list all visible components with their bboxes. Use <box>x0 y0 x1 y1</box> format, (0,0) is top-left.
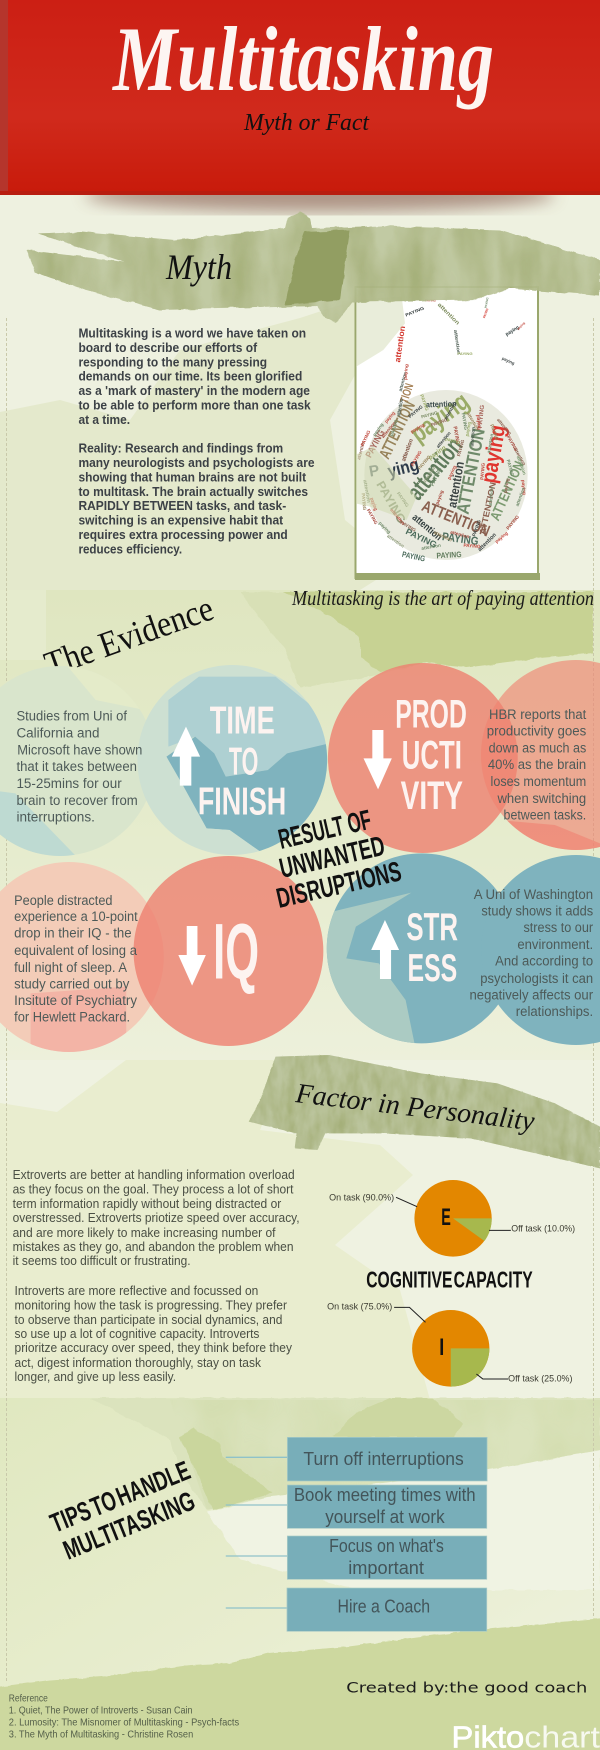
pie chart: introverts: Off task (25.0%) <box>508 1374 572 1384</box>
myth text block: RAPIDLY BETWEEN tasks, and task- <box>78 499 286 513</box>
word cloud image: PAYING <box>407 404 424 419</box>
pie chart: extroverts: E <box>441 1205 451 1231</box>
word cloud image: P <box>368 462 381 481</box>
circle: studies <box>0 666 146 856</box>
text: people: for Hewlett Packard. <box>14 1010 130 1025</box>
word cloud image: PAYING <box>399 520 417 533</box>
label: stress: ESS <box>408 946 457 989</box>
label: time to finish: FINISH <box>198 779 286 823</box>
text: extroverts: it seems too difficult or frustrating. <box>13 1254 191 1268</box>
word cloud image: ATTENTION <box>377 399 419 462</box>
bottom torn band <box>0 1618 600 1750</box>
references: 1. Quiet, The Power of Introverts - Susan Cain <box>9 1706 193 1716</box>
myth text block: demands on our time. Its been glorified <box>78 370 302 384</box>
text: people: Insitute of Psychiatry <box>14 993 137 1009</box>
background: tips section <box>0 1398 600 1750</box>
word cloud image: attention <box>396 398 405 417</box>
word cloud image: PAYING <box>405 305 426 318</box>
subtitle: Myth or Fact <box>243 110 370 136</box>
text: extroverts: Extroverts are better at handling information overload <box>13 1168 295 1182</box>
text: people: People distracted <box>14 893 112 909</box>
myth text block: at a time. <box>78 413 130 427</box>
word cloud image: PAYING <box>482 308 489 319</box>
word cloud image: PAYING <box>419 394 430 412</box>
word cloud image: paying <box>427 444 448 462</box>
word cloud image: paying <box>403 363 409 380</box>
text: studies: brain to recover from <box>16 793 138 809</box>
text: extroverts: term information rapidly without being distracted or <box>13 1197 282 1211</box>
word cloud image: PAYING <box>389 419 399 437</box>
word cloud image: paying <box>503 478 510 494</box>
references: Reference <box>9 1694 48 1704</box>
circle: productivity <box>328 663 518 853</box>
word cloud image: attention <box>421 543 441 551</box>
tip: book meeting times: yourself at work <box>325 1507 445 1528</box>
word cloud image: paying <box>435 489 444 505</box>
arrow: productivity down <box>364 730 392 789</box>
word cloud image: attention <box>386 533 405 549</box>
text: introverts: act, digest information thoroughly, stay on task <box>15 1356 261 1370</box>
label: productivity: UCTI <box>402 733 462 778</box>
word cloud image: PAYING <box>430 417 448 428</box>
text: people: drop in their IQ - the <box>14 926 132 941</box>
heading: Myth: Myth <box>165 247 232 287</box>
header shadow <box>85 178 555 212</box>
tip: turn off interruptions: Turn off interruptions <box>303 1449 464 1470</box>
text: extroverts <box>13 1168 300 1268</box>
tips section <box>9 1437 600 1750</box>
myth brush stroke <box>26 212 600 323</box>
word cloud image: attention <box>380 421 397 439</box>
word cloud image: PAYING <box>463 543 481 549</box>
word cloud image: paying <box>494 531 509 544</box>
tip: hire a coach: Hire a Coach <box>337 1597 430 1617</box>
label: productivity <box>395 692 467 818</box>
word cloud image: PAYING <box>436 550 462 560</box>
dashed side borders <box>6 318 594 1683</box>
myth text block: board to describe our efforts of <box>78 341 258 355</box>
word cloud image: ying <box>385 454 421 481</box>
myth text block: to multitask. The brain actually switches <box>78 485 308 499</box>
references <box>9 1694 239 1740</box>
background washes: myth section <box>0 300 420 590</box>
word cloud image: attention <box>426 399 457 409</box>
word cloud image: PAYING <box>479 462 486 480</box>
connector lines <box>226 1457 287 1608</box>
word cloud image: attention <box>401 438 415 462</box>
pie chart: extroverts <box>329 1180 575 1257</box>
text: extroverts: overstressed. Extroverts priotize speed over accuracy, <box>13 1211 300 1225</box>
text: people <box>14 893 138 1025</box>
pie chart: introverts <box>327 1302 572 1387</box>
callout: result of unwanted disruptions: RESULT OF <box>275 804 374 855</box>
myth text block: showing that human brains are not built <box>78 470 307 484</box>
word cloud image: PAYING <box>505 514 520 531</box>
word cloud image: paying <box>445 436 461 445</box>
text: uni of washington <box>470 887 593 1020</box>
myth text block: requires extra processing power and <box>78 528 288 542</box>
text: studies: that it takes between <box>16 759 137 775</box>
label: time to finish: TO <box>229 739 258 783</box>
word cloud image: attention <box>477 532 498 553</box>
word cloud image: PAYING <box>461 413 469 431</box>
heading: The Evidence: The Evidence <box>39 588 218 685</box>
word cloud image: attention <box>488 487 494 507</box>
word cloud image: ATTENTION <box>419 498 492 541</box>
word cloud image: PAYING <box>506 459 515 477</box>
circle: people <box>0 862 164 1053</box>
label: stress: STR <box>406 905 458 948</box>
tip: focus: important <box>348 1558 424 1579</box>
word cloud image: PAYING <box>373 478 409 526</box>
arrow: IQ down <box>178 926 206 986</box>
text: introverts: Introverts are more reflective and focussed on <box>15 1284 258 1298</box>
references: 3. The Myth of Multitasking - Christine Rosen <box>9 1730 193 1740</box>
word cloud image: paying <box>410 422 425 434</box>
word cloud image: PAYING <box>366 508 379 526</box>
tip: book meeting times: Book meeting times with <box>294 1485 476 1506</box>
word cloud image: attention <box>433 530 453 543</box>
word cloud image: attention <box>422 465 437 484</box>
myth text block: as a 'mark of mastery' in the modern age <box>78 384 310 398</box>
tip: focus: Focus on what's <box>329 1536 444 1557</box>
word cloud image: TION <box>397 382 416 405</box>
word cloud image: attention <box>361 479 371 503</box>
text: studies: interruptions. <box>16 809 95 825</box>
text: introverts: so use up a lot of cognitive capacity. Introverts <box>15 1327 260 1341</box>
word cloud image <box>355 287 540 580</box>
text: studies: 15-25mins for our <box>16 776 122 792</box>
word cloud image: attention <box>436 302 461 327</box>
text: extroverts: mistakes as they go, and abandon the problem when <box>13 1240 293 1254</box>
word cloud image: paying <box>384 410 396 424</box>
word cloud image: attention <box>496 417 512 436</box>
pie chart: introverts: I <box>439 1335 444 1361</box>
tip: focus <box>287 1536 487 1579</box>
word cloud image: PAYING <box>488 424 499 441</box>
arrow: stress up <box>371 920 399 979</box>
word cloud image: paying <box>505 325 520 338</box>
text: studies: Studies from Uni of <box>16 709 128 724</box>
text: studies: Microsoft have shown <box>17 742 142 758</box>
pie chart: introverts: On task (75.0%) <box>327 1302 392 1312</box>
word cloud image: paying <box>404 386 474 448</box>
word cloud image: PAYING <box>478 404 486 429</box>
myth text block: switching is an expensive habit that <box>78 514 284 528</box>
text: people: equivalent of losing a <box>14 943 138 959</box>
word cloud image: paying <box>501 356 516 366</box>
word cloud image: attention <box>443 401 457 420</box>
word cloud image: attention <box>450 529 470 539</box>
myth text block: responding to the many pressing <box>78 355 267 369</box>
myth text block: Reality: Research and findings from <box>78 442 283 456</box>
word cloud image: paying <box>476 423 510 485</box>
credit: Created by:the good coach <box>346 1680 587 1696</box>
word cloud image: paying <box>368 497 378 512</box>
myth text block: to be able to perform more than one task <box>78 398 312 412</box>
tip: hire a coach <box>287 1588 487 1631</box>
heading: tips to handle multitasking: MULTITASKING <box>59 1486 199 1566</box>
tip: turn off interruptions <box>287 1437 487 1481</box>
text: studies <box>16 709 142 825</box>
word cloud image: PAYING <box>361 493 367 511</box>
word cloud image: attention <box>515 487 526 507</box>
word cloud image: PAYING <box>430 467 444 488</box>
label: productivity: PROD <box>395 692 467 737</box>
word cloud image: ATTENTION <box>453 427 489 516</box>
word cloud image: attention <box>398 371 408 392</box>
text: introverts: monitoring how the task is progressing. They prefer <box>15 1298 287 1312</box>
word cloud image: attention <box>389 507 406 526</box>
background: evidence section <box>0 590 600 1060</box>
word cloud image: PAYING <box>410 450 423 467</box>
word cloud image: attention <box>453 329 461 355</box>
evidence circles <box>0 660 600 1053</box>
pie chart: extroverts: On task (90.0%) <box>329 1193 394 1203</box>
logo: Piktochart <box>452 1719 600 1750</box>
circle: time to finish <box>137 665 333 857</box>
word cloud image: ATTENTION <box>486 459 527 523</box>
word cloud image: paying <box>378 521 392 535</box>
text: people: full night of sleep. A <box>14 960 128 976</box>
word cloud image: PAYING <box>360 429 372 447</box>
callout: result of unwanted disruptions: UNWANTED <box>276 830 388 884</box>
word cloud image: attention <box>393 325 407 363</box>
heading: Factor in Personality: Factor in Personality <box>293 1078 537 1137</box>
word cloud image: PAYING <box>417 454 432 471</box>
word cloud image: PAYING <box>364 428 387 459</box>
text: introverts: prioritze accuracy over speed, they think before they <box>15 1341 292 1355</box>
word cloud image: paying <box>372 422 385 437</box>
word cloud image: PAYING <box>456 439 465 457</box>
myth text block: Multitasking is a word we have taken on <box>78 326 306 340</box>
word cloud image: paying <box>446 465 457 480</box>
arrow: time up <box>172 727 200 786</box>
word cloud image: attention <box>469 427 476 447</box>
circle: uni of washington <box>481 855 600 1045</box>
text: extroverts: as they focus on the goal. They process a lot of short <box>13 1182 294 1196</box>
word cloud image: paying <box>516 321 526 331</box>
label: stress <box>406 905 458 989</box>
word cloud image: PAYING <box>451 426 460 445</box>
text: people: study carried out by <box>14 977 130 992</box>
evidence circles: IQ <box>213 907 259 995</box>
callout: result of unwanted disruptions <box>273 804 404 914</box>
word cloud image: PAYING <box>471 519 482 537</box>
text: people: experience a 10-point <box>14 909 138 925</box>
references: 2. Lumosity: The Misnomer of Multitasking - Psych-facts <box>9 1718 239 1728</box>
word cloud image: PAYING <box>425 299 437 303</box>
word cloud image: PAYING <box>396 491 410 508</box>
word cloud image: attention <box>516 455 527 476</box>
callout: result of unwanted disruptions: DISRUPTIONS <box>273 855 404 914</box>
background: personality section <box>0 1060 600 1400</box>
text: HBR <box>487 707 587 823</box>
word cloud image: PAYING <box>484 296 490 309</box>
myth text block <box>78 326 315 556</box>
word cloud image: PAYING <box>404 526 439 550</box>
title: Multitasking <box>111 8 494 110</box>
circle: IQ <box>134 856 323 1046</box>
word cloud image: PAYING <box>421 410 439 419</box>
myth text block: reduces efficiency. <box>78 542 182 556</box>
personality text and charts <box>13 1168 575 1387</box>
text: introverts: to observe than participate in social dynamics, and <box>15 1313 282 1327</box>
circle: HBR <box>481 660 600 853</box>
word cloud image: paying <box>521 480 527 495</box>
text: introverts <box>15 1284 292 1384</box>
word cloud image: attention <box>445 460 467 509</box>
word cloud image: PAYING <box>401 550 426 563</box>
label: time to finish <box>198 698 286 823</box>
text: studies: California and <box>16 725 99 741</box>
word cloud image: attention <box>512 446 527 466</box>
word cloud image: ATTENTION <box>477 481 498 535</box>
pie chart: extroverts: Off task (10.0%) <box>511 1224 575 1234</box>
word cloud image: attention <box>402 433 468 505</box>
label: productivity: VITY <box>401 774 463 818</box>
word cloud image: PAYING <box>457 352 473 356</box>
word cloud image: attention <box>486 433 494 454</box>
word cloud image: attention <box>356 440 366 460</box>
text: extroverts: and are more likely to make increasing number of <box>13 1226 276 1240</box>
heading: tips to handle multitasking: TIPS TO HANDLE <box>46 1455 194 1539</box>
myth text block: many neurologists and psychologists are <box>78 456 315 470</box>
word cloud image: attention <box>466 411 480 431</box>
word cloud image: attention <box>435 431 452 449</box>
word cloud image: attention <box>410 512 444 543</box>
word cloud image: paying <box>464 421 472 437</box>
text: introverts: longer, and give up less easily. <box>15 1370 176 1384</box>
heading: tips to handle multitasking <box>46 1455 199 1566</box>
word cloud image: paying <box>476 415 482 430</box>
label: time to finish: TIME <box>210 698 275 742</box>
word cloud image: PAYING <box>441 531 479 548</box>
word cloud image: PAYING <box>506 435 519 452</box>
circle: stress <box>326 853 500 1044</box>
header banner <box>0 0 600 195</box>
personality brush stroke <box>249 1055 600 1168</box>
tip: book meeting times <box>287 1485 487 1528</box>
